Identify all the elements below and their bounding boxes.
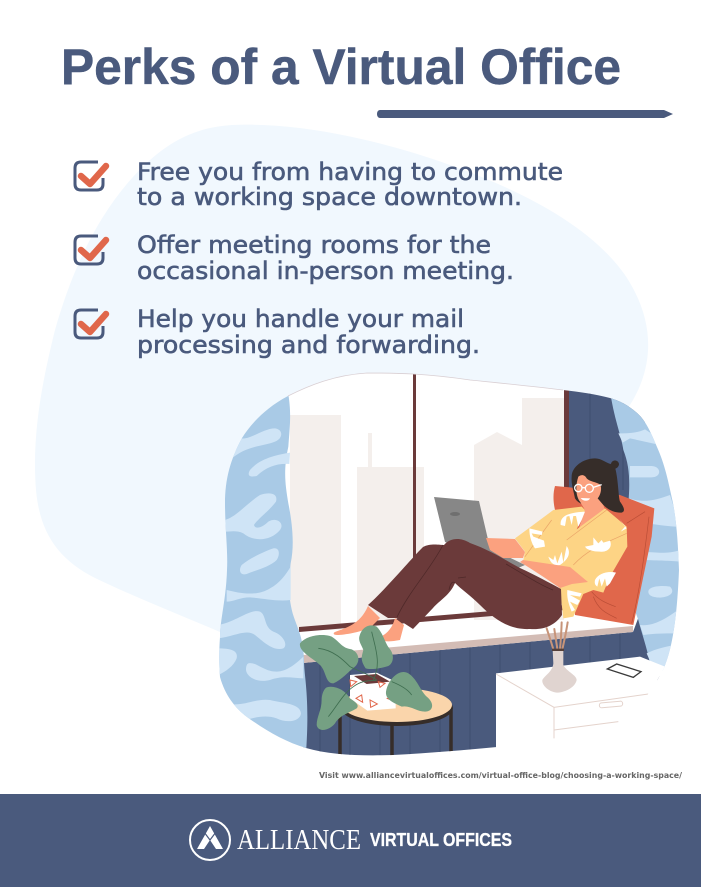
text: item 1: Free you from having to commute <box>137 158 563 186</box>
icon: checkbox 3 <box>75 310 106 338</box>
side table <box>340 688 453 760</box>
text: item 3: processing and forwarding. <box>137 331 480 359</box>
background blob <box>35 125 648 660</box>
upper right wall <box>569 390 645 498</box>
window frame <box>413 374 416 569</box>
illustration: woman working by window <box>219 374 679 756</box>
illustration outline <box>288 373 563 396</box>
shirt pattern <box>529 512 627 612</box>
right side scene <box>496 398 679 738</box>
checklist item 1 <box>75 158 563 211</box>
vase with sticks <box>542 622 577 693</box>
trousers <box>368 539 562 629</box>
white cabinet <box>496 656 664 690</box>
logo icon <box>190 820 230 860</box>
face and neck <box>576 475 605 530</box>
logo subtitle: VIRTUAL OFFICES <box>370 830 512 850</box>
icon: checkbox 2 <box>75 236 106 264</box>
shirt <box>515 507 627 618</box>
feet <box>334 606 380 635</box>
text: item 3: Help you handle your mail <box>137 305 464 333</box>
smile <box>581 498 590 501</box>
glasses <box>575 484 602 492</box>
source link: Visit www.alliancevirtualoffices.com/virtual-office-blog/choosing-a-working-space/ <box>319 771 682 780</box>
sill bar <box>299 605 565 632</box>
phone <box>607 664 641 677</box>
icon: checkbox 1 <box>75 162 106 190</box>
checklist item 2 <box>75 231 514 285</box>
footer band <box>0 794 701 887</box>
lower wall panels <box>303 618 660 756</box>
window background <box>285 374 564 655</box>
text: item 2: occasional in-person meeting. <box>137 257 514 285</box>
hand on laptop <box>486 538 525 558</box>
checklist item 3 <box>75 305 480 359</box>
logo wordmark: ALLIANCE <box>237 825 361 856</box>
hair <box>572 458 624 513</box>
sill edge <box>303 626 633 663</box>
text: item 2: Offer meeting rooms for the <box>137 231 491 259</box>
arm <box>520 560 588 588</box>
left curtain <box>219 396 308 748</box>
title underline arrow <box>377 110 673 118</box>
right curtain <box>611 398 679 668</box>
leaves <box>300 625 432 730</box>
laptop <box>434 497 525 568</box>
text: item 1: to a working space downtown. <box>137 183 522 211</box>
potted plant <box>300 625 432 730</box>
title: Perks of a Virtual Office <box>61 39 621 95</box>
pillow <box>553 486 654 625</box>
plant pot <box>350 673 396 711</box>
skyline buildings <box>290 398 564 630</box>
